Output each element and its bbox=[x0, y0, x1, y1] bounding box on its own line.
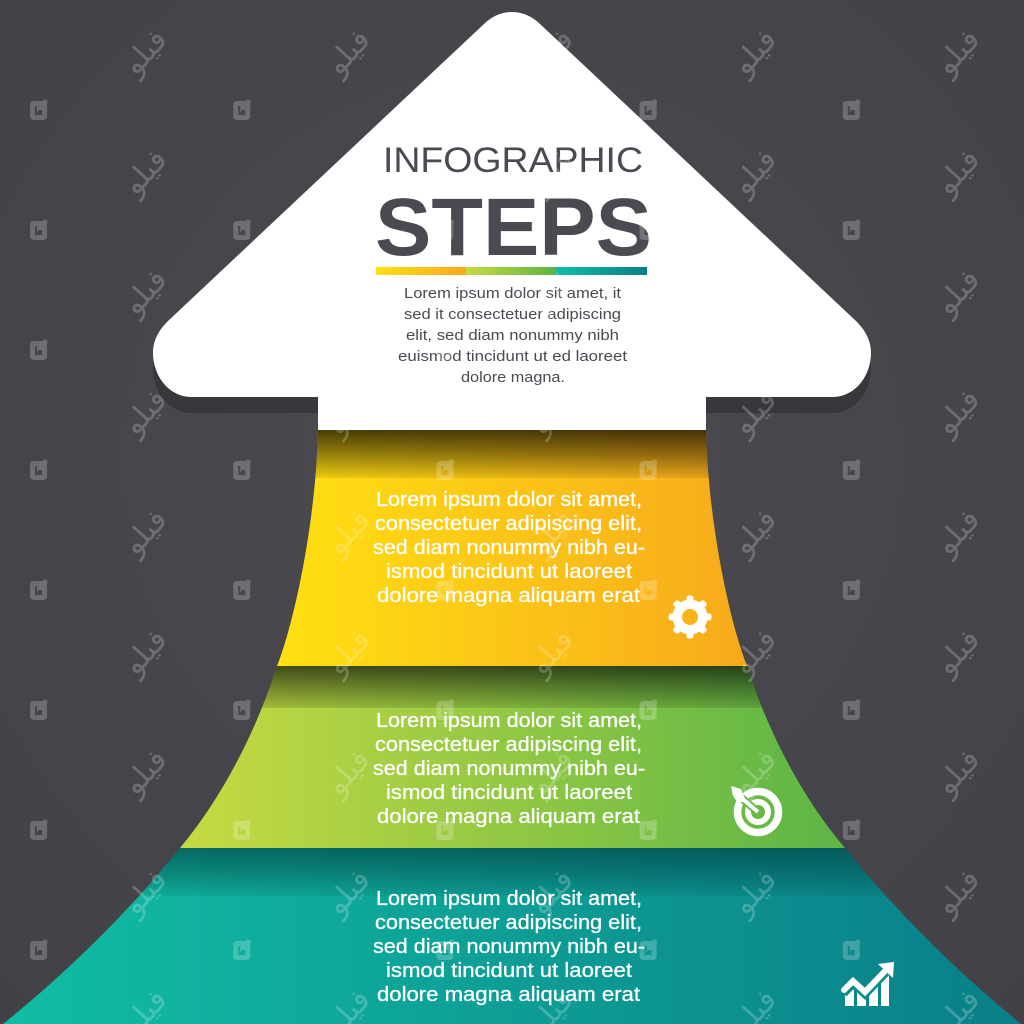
intro paragraph: sed it consectetuer adipiscing bbox=[404, 306, 621, 323]
step 1 text: dolore magna aliquam erat bbox=[377, 585, 640, 607]
icon: target with arrow bbox=[731, 786, 778, 832]
title: STEPS bbox=[375, 182, 652, 273]
title bbox=[375, 141, 652, 273]
step 1 text: Lorem ipsum dolor sit amet, bbox=[376, 489, 642, 511]
step 1 text: consectetuer adipiscing elit, bbox=[375, 513, 642, 535]
intro paragraph: dolore magna. bbox=[461, 369, 565, 386]
step 3 text: dolore magna aliquam erat bbox=[377, 984, 640, 1006]
tricolour title underline bbox=[376, 267, 647, 275]
step 2 text: dolore magna aliquam erat bbox=[377, 806, 640, 828]
arrow head bbox=[153, 12, 871, 430]
intro paragraph: euismod tincidunt ut ed laoreet bbox=[398, 348, 628, 365]
intro paragraph: elit, sed diam nonummy nibh bbox=[406, 327, 619, 344]
arrow head drop shadow bbox=[153, 28, 871, 430]
step 2 text: sed diam nonummy nibh eu- bbox=[373, 758, 645, 780]
step 1 text: ismod tincidunt ut laoreet bbox=[386, 561, 632, 583]
panel: step 3 teal bbox=[0, 848, 1024, 1024]
intro paragraph bbox=[398, 285, 628, 386]
flared arrow shaft with three coloured steps bbox=[0, 430, 1024, 1024]
step 3 text: consectetuer adipiscing elit, bbox=[375, 912, 642, 934]
step 3 text: sed diam nonummy nibh eu- bbox=[373, 936, 645, 958]
intro paragraph: Lorem ipsum dolor sit amet, it bbox=[404, 285, 622, 302]
step 2 text bbox=[373, 710, 645, 828]
icon: gear bbox=[668, 596, 712, 638]
step 2 text: consectetuer adipiscing elit, bbox=[375, 734, 642, 756]
step 2 text: ismod tincidunt ut laoreet bbox=[386, 782, 632, 804]
step 3 text: ismod tincidunt ut laoreet bbox=[386, 960, 632, 982]
panel: step 2 green bbox=[150, 666, 870, 848]
panel: step 1 yellow bbox=[250, 430, 770, 666]
icon: rising bar chart bbox=[843, 962, 894, 1006]
step 1 text bbox=[373, 489, 645, 607]
step 1 text: sed diam nonummy nibh eu- bbox=[373, 537, 645, 559]
title: INFOGRAPHIC bbox=[383, 141, 643, 180]
step 3 text: Lorem ipsum dolor sit amet, bbox=[376, 888, 642, 910]
step 3 text bbox=[373, 888, 645, 1006]
step 2 text: Lorem ipsum dolor sit amet, bbox=[376, 710, 642, 732]
